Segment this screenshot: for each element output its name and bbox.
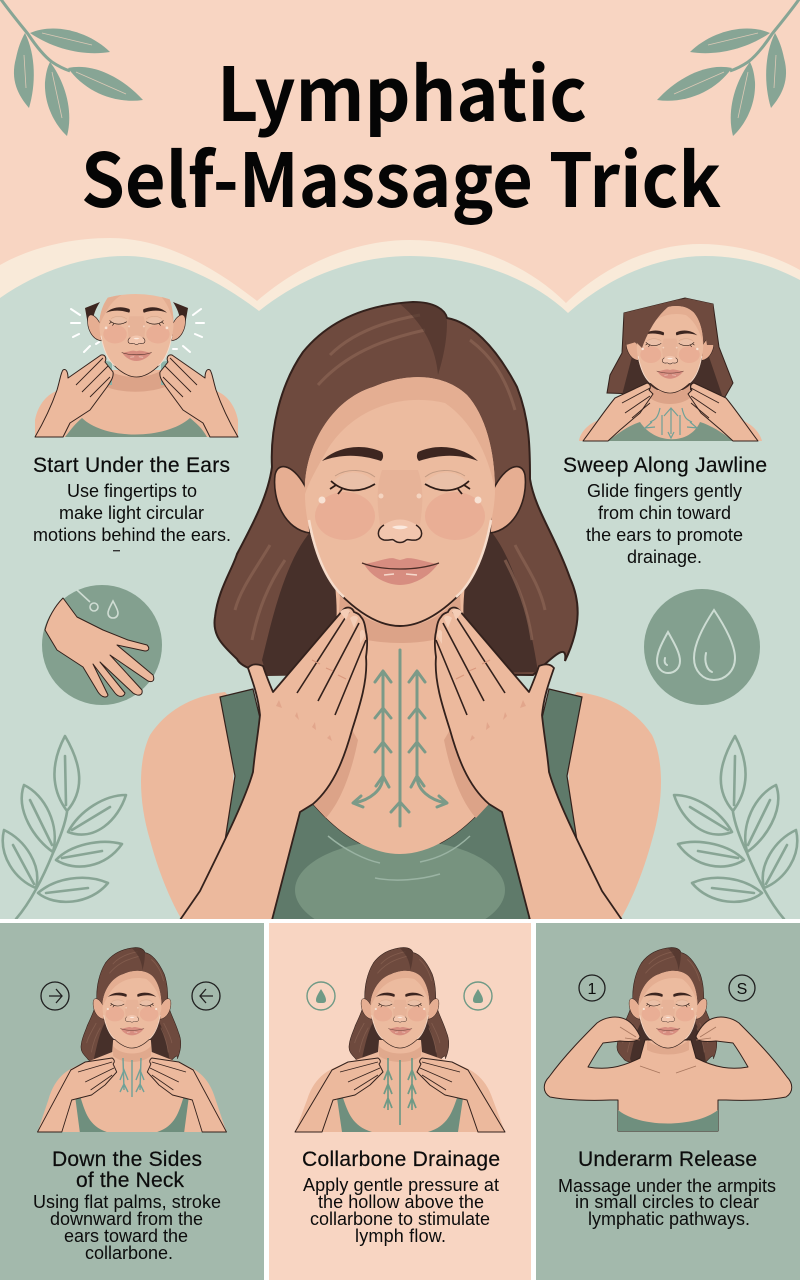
badge: water droplets: [644, 589, 760, 705]
divider strip above panels: [0, 919, 800, 923]
hands: [180, 608, 622, 920]
text: sweep along jawline: Sweep Along Jawline: [563, 454, 767, 477]
lymph flow arrows: [353, 650, 447, 826]
text: collarbone drainage: Apply gentle pressure at: [303, 1175, 499, 1195]
panel: underarm release: [536, 923, 800, 1280]
header band: [0, 0, 800, 320]
title: [81, 36, 721, 229]
text: sweep along jawline: Glide fingers gently: [587, 481, 742, 501]
green tank top: [220, 689, 582, 940]
icon: leaf branch top left: [0, 0, 143, 136]
icon: letter badge: [729, 975, 755, 1001]
text: down the sides: [33, 1148, 221, 1263]
title: Lymphatic: [217, 36, 587, 143]
text: sweep along jawline: drainage.: [627, 547, 702, 567]
text: sweep along jawline: [563, 454, 767, 567]
hair: [214, 302, 578, 676]
shoulders: [141, 692, 661, 920]
text: collarbone drainage: the hollow above the: [318, 1192, 484, 1212]
text: underarm release: lymphatic pathways.: [588, 1209, 750, 1229]
text: sweep along jawline: from chin toward: [598, 503, 731, 523]
text: collarbone drainage: [302, 1148, 500, 1246]
panel: collarbone drainage: [269, 923, 531, 1280]
text: down the sides: collarbone.: [85, 1243, 173, 1263]
text: down the sides: Down the Sides: [52, 1148, 202, 1171]
text: down the sides: downward from the: [50, 1209, 203, 1229]
figure: woman stroking neck: [37, 948, 226, 1132]
main illustration: woman massaging neck: [141, 302, 661, 940]
text: underarm release: [558, 1148, 776, 1229]
text: start under the ears: motions behind the ears.: [33, 525, 231, 545]
icon: number badge: 1: [588, 981, 597, 998]
step figure: sweep along jawline: [579, 298, 762, 441]
text: underarm release: in small circles to clear: [575, 1192, 759, 1212]
text: down the sides: ears toward the: [64, 1226, 188, 1246]
text: collarbone drainage: collarbone to stimulate: [310, 1209, 490, 1229]
text: down the sides: Using flat palms, stroke: [33, 1192, 221, 1212]
panel: down the sides of the neck: [0, 923, 264, 1280]
text: underarm release: Massage under the armpits: [558, 1176, 776, 1196]
face: [275, 377, 525, 626]
text: start under the ears: make light circular: [59, 503, 204, 523]
icon: letter badge: S: [737, 981, 747, 998]
text: start under the ears: Start Under the Ears: [33, 454, 230, 477]
icon: droplet left: [307, 982, 335, 1010]
figure: woman arms raised: [544, 948, 792, 1131]
step figure: start under the ears: [35, 280, 238, 437]
icon: droplet right: [464, 982, 492, 1010]
text: underarm release: Underarm Release: [578, 1148, 757, 1171]
figure: woman collarbone: [295, 948, 505, 1132]
icon: outline leaf bottom right: [674, 736, 797, 919]
neck and chest: [300, 585, 500, 854]
text: collarbone drainage: lymph flow.: [355, 1226, 446, 1246]
text: start under the ears: Use fingertips to: [67, 481, 197, 501]
text: start under the ears: [33, 454, 231, 551]
text: down the sides: of the Neck: [76, 1169, 184, 1192]
icon: outline leaf bottom left: [3, 736, 126, 919]
icon: leaf branch top right: [657, 0, 800, 136]
badge: hand with droplet: [42, 585, 162, 705]
title: Self-Massage Trick: [81, 122, 721, 229]
text: collarbone drainage: Collarbone Drainage: [302, 1148, 500, 1171]
icon: arrow left: [192, 982, 220, 1010]
icon: sparkle lines around ears: [71, 309, 204, 352]
cream wave band and mint background: [0, 238, 800, 920]
icon: number badge: [579, 975, 605, 1001]
text: sweep along jawline: the ears to promote: [586, 525, 743, 545]
icon: arrow right: [41, 982, 69, 1010]
